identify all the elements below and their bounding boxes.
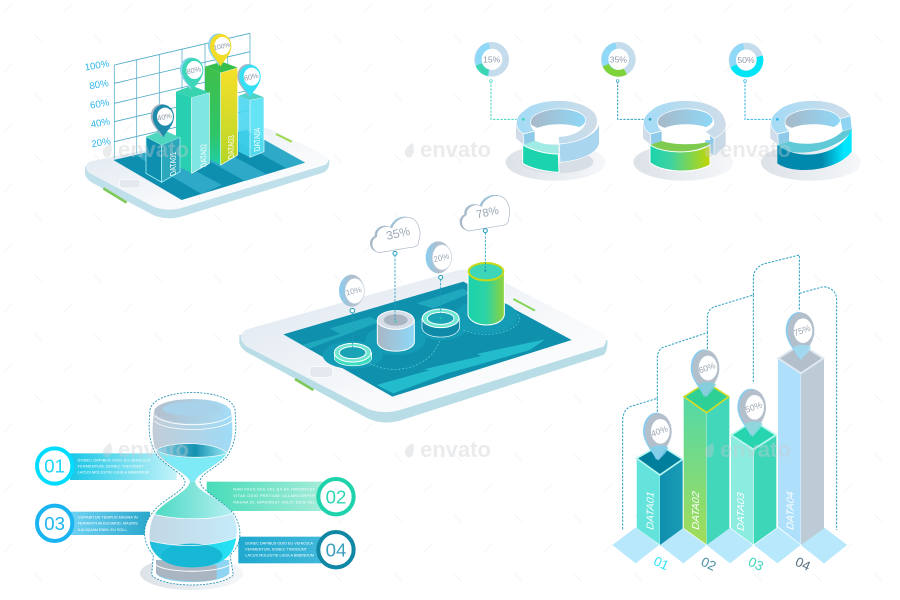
bar: data02: DATA02 — [199, 143, 209, 169]
pin: 50%: 50% — [744, 399, 764, 415]
callout 03 bar: FERMENTUM EUISMOD, MAURIS — [78, 522, 138, 526]
panel: tablet with cylinders — [239, 195, 607, 423]
bar: data02 — [176, 86, 209, 173]
grid with percent axis: 20% — [91, 136, 112, 150]
callout 01 bar — [70, 453, 177, 480]
badge 02 — [318, 479, 354, 514]
callout 02 bar: MAGNA ID, IMPERDIET VELIT, DUIS VEL — [233, 500, 315, 504]
bar: data04: DATA04 — [785, 489, 796, 532]
pin: 80%: 80% — [186, 64, 202, 76]
badge 04 — [318, 532, 354, 567]
pin: 60% — [237, 64, 261, 97]
pin: 100%: 100% — [213, 42, 231, 52]
grid with percent axis — [84, 33, 250, 158]
callout 03 bar: A ALIQUAM ENIM, EU SOLL. — [78, 528, 128, 532]
panel: ring charts — [478, 45, 861, 181]
callout 03 bar: CURABITUR TEMPUS MAGNA IN — [78, 516, 138, 520]
badge 03 — [37, 506, 72, 541]
grid with percent axis: 80% — [89, 78, 110, 92]
watermarks: envato — [118, 137, 189, 162]
bar: data03 — [205, 62, 238, 165]
hourglass — [140, 392, 243, 590]
bar: data01: DATA01 — [645, 489, 656, 532]
pin: 75% — [786, 312, 814, 360]
pin: 60%: 60% — [697, 360, 717, 376]
bar: data02: DATA02 — [690, 489, 702, 532]
phone body — [85, 127, 329, 218]
panel: tall bar chart — [612, 255, 847, 574]
callout 01 bar: FERMENTUM, DONEC TINCIDUNT — [78, 464, 144, 468]
axis labels — [651, 553, 813, 574]
ring chart 50% — [732, 46, 861, 181]
pin: 60% — [691, 349, 719, 397]
badge 03: 03 — [44, 513, 65, 534]
pin: 100% — [208, 33, 231, 67]
cylinder 35% — [377, 311, 414, 351]
pin: 60%: 60% — [243, 71, 260, 83]
callout 03 bar — [70, 512, 150, 535]
panel: hourglass with callouts — [37, 392, 354, 590]
watermarks — [103, 137, 791, 462]
axis labels: 03 — [746, 554, 766, 574]
axis labels: 04 — [793, 554, 813, 574]
ring chart 15%: 15% — [483, 54, 501, 64]
badge 01 — [37, 448, 72, 484]
pin: 40%: 40% — [649, 423, 669, 439]
bar: data04: DATA04 — [252, 126, 262, 153]
watermarks: envato — [720, 437, 791, 462]
callout 01 bar: LACUS MOLESTIE LIGULA BIBENDUM — [78, 470, 149, 474]
panel: phone bar chart — [84, 33, 329, 218]
tablet body — [239, 270, 607, 423]
badge 20%: 20% — [433, 252, 450, 264]
floor tiles — [612, 527, 847, 563]
badge 01: 01 — [44, 456, 65, 477]
bar: data04 — [238, 92, 264, 157]
bar: data02 — [683, 383, 729, 545]
callout 04 bar: DONEC DAPIBUS ODIO EU VEHICULA — [245, 542, 313, 546]
pin: 40% — [643, 413, 672, 461]
watermarks: envato — [420, 437, 491, 462]
grid with percent axis: 100% — [84, 58, 111, 74]
ring chart 15% — [478, 45, 606, 181]
watermarks: envato — [720, 137, 791, 162]
axis labels: 01 — [651, 553, 671, 573]
badge 20% — [426, 241, 452, 318]
badge 10% — [339, 275, 364, 350]
bar: data01 — [146, 130, 180, 182]
ring chart 50%: 50% — [737, 55, 755, 65]
callout 02 bar: NAM FACILISIS VEL EX AC IMPERDIET — [233, 488, 316, 492]
grid with percent axis: 60% — [89, 97, 111, 112]
flat ring 10% — [334, 343, 372, 366]
cloud 78%: 78% — [475, 205, 500, 221]
badge 04: 04 — [326, 539, 346, 560]
ring chart 35% — [604, 45, 733, 181]
watermarks: envato — [118, 437, 189, 462]
callout 04 bar: LACUS MOLESTIE LIGULA BIBENDUM — [245, 554, 314, 558]
callout 04 bar — [238, 537, 322, 563]
cylinder 78% — [468, 263, 504, 325]
callout 02 bar: VITAE ODIO PRETIUM, ULLAMCORPER — [233, 494, 315, 498]
grid with percent axis: 40% — [90, 116, 111, 131]
pin: 40% — [151, 104, 174, 137]
bar: data03: DATA03 — [735, 490, 747, 533]
ring 20% — [422, 309, 459, 337]
bar: data01 — [637, 445, 683, 545]
cloud 35% — [370, 217, 420, 322]
watermarks: envato — [420, 137, 491, 162]
bar: data01: DATA01 — [168, 151, 178, 177]
badge 02: 02 — [326, 486, 346, 507]
bar: data03 — [731, 421, 777, 545]
ring chart 35%: 35% — [610, 54, 627, 64]
callout 02 bar — [207, 482, 323, 511]
ripples and dashed path — [323, 300, 520, 369]
pin: 80% — [180, 57, 203, 91]
badge 10%: 10% — [345, 285, 363, 298]
callout 01 bar: DONEC DAPIBUS ODIO EU VEHICULA — [78, 458, 151, 462]
pin: 75%: 75% — [792, 323, 812, 338]
pin: 50% — [737, 389, 766, 437]
dashed connectors — [623, 255, 837, 530]
callout 04 bar: FERMENTUM, DONEC TINCIDUNT — [245, 548, 308, 552]
cloud 35%: 35% — [385, 224, 412, 243]
axis labels: 02 — [699, 554, 718, 574]
bar: data04 — [778, 344, 824, 545]
bar: data03: DATA03 — [226, 134, 236, 160]
pin: 40%: 40% — [156, 111, 173, 123]
cloud 78% — [460, 195, 510, 271]
